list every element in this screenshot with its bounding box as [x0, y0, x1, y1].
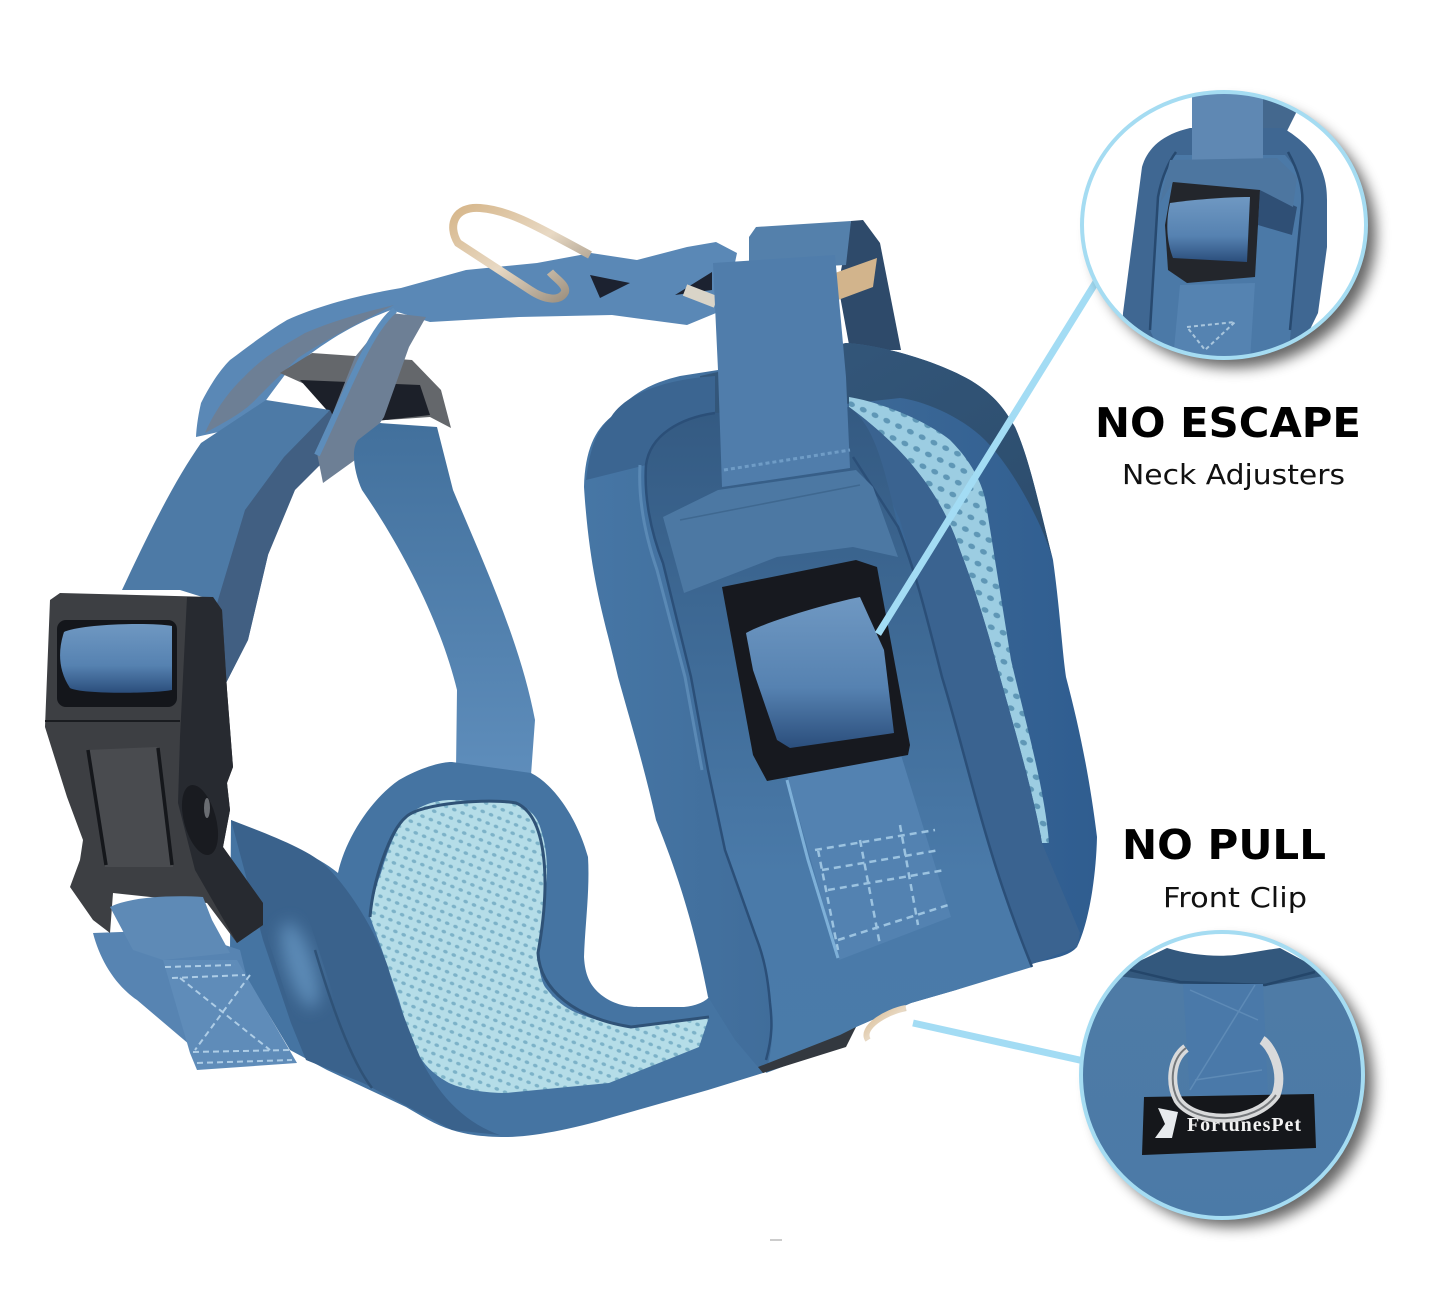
- lower pad mesh: [370, 800, 709, 1093]
- front D-ring peek: [866, 1008, 906, 1040]
- top dark rim: [700, 343, 1053, 560]
- fold seam: [315, 950, 372, 1088]
- harness main product illustration: [45, 208, 1097, 1240]
- heading: no escape: NO ESCAPE: [1095, 399, 1361, 447]
- strap end with stitching: [163, 960, 297, 1070]
- back strap behind pad: [749, 220, 901, 350]
- lower webbing in buckle: [110, 896, 230, 960]
- callout circle: front clip detail: [1070, 932, 1380, 1227]
- side mesh: [849, 397, 1049, 843]
- central panel: [646, 407, 1032, 1073]
- icon: back D-ring: [453, 208, 590, 299]
- adjuster slider: [722, 560, 910, 781]
- chest strap: [354, 423, 535, 775]
- rear neck slider: [280, 353, 451, 428]
- brand label: FortunesPet: [1187, 1114, 1301, 1136]
- buckle split line: [45, 720, 180, 722]
- under-buckle outer pad: [93, 930, 262, 1045]
- small specks under the harness: [770, 1239, 782, 1241]
- crossing strap: [317, 313, 426, 483]
- crossing strap light edge: [317, 310, 395, 455]
- buckle dark side: [178, 597, 263, 943]
- wide side strap: [122, 400, 330, 685]
- large back pad: [584, 343, 1097, 1073]
- heading: no pull: NO PULL: [1122, 821, 1326, 869]
- callout line: neck adjusters: [878, 282, 1096, 634]
- pad seams: [646, 413, 1032, 1060]
- side strap underside: [215, 410, 345, 685]
- lower webbing tail: [787, 755, 951, 960]
- buckle window: [57, 620, 177, 707]
- slider shadow: [300, 380, 430, 425]
- lower chest pad: [93, 762, 770, 1137]
- callout line: front clip: [913, 1023, 1084, 1061]
- label: neck adjusters: Neck Adjusters: [1122, 458, 1345, 491]
- dark band beside mesh: [849, 407, 1080, 972]
- label: front clip: Front Clip: [1163, 881, 1307, 914]
- D-ring: [1173, 1040, 1279, 1118]
- webbing in window: [60, 624, 172, 693]
- brand label: [1142, 1094, 1316, 1155]
- mesh seam: [370, 801, 709, 1027]
- callout circle: neck adjusters detail: [1082, 92, 1376, 370]
- buckle clasp: [175, 781, 225, 859]
- outer left rim top: [586, 376, 715, 480]
- thin back loop strap: [196, 242, 737, 437]
- left dark fold: [231, 820, 500, 1135]
- buckle recess: [87, 747, 173, 867]
- side release buckle: [45, 593, 263, 960]
- fold highlight: [273, 918, 327, 1012]
- upper webbing strap over pad: [663, 255, 898, 593]
- black tag under pad: [758, 1027, 856, 1073]
- lighter seam edge: [640, 465, 702, 770]
